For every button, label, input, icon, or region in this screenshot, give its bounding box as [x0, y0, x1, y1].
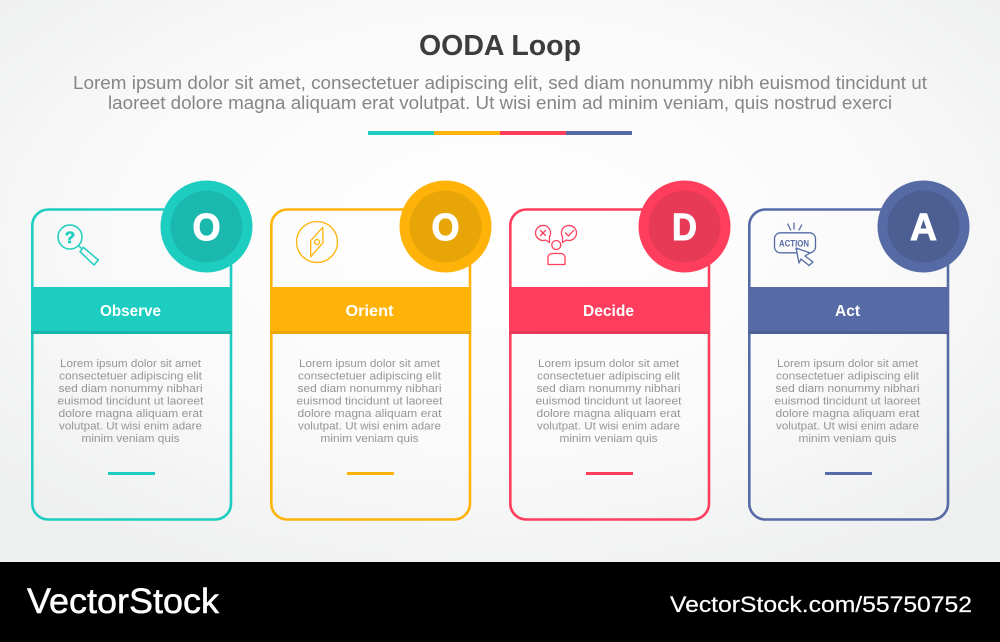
body text: Decide: Lorem ipsum dolor sit amet	[538, 358, 679, 370]
header band: Observe: Observe	[100, 303, 161, 320]
badge: A	[878, 180, 970, 272]
header band: Decide	[509, 287, 710, 334]
body text: Act: Lorem ipsum dolor sit amet	[777, 358, 918, 370]
header band: Orient: Orient	[346, 303, 394, 320]
body text: Observe: Lorem ipsum dolor sit amet	[60, 358, 201, 370]
body text: Act: minim veniam quis	[798, 433, 897, 445]
body text: Decide: sed diam nonummy nibhari	[536, 383, 680, 395]
title: OODA Loop	[419, 30, 581, 62]
footer image id: VectorStock.com/55750752	[670, 592, 972, 617]
header band: Act	[748, 287, 949, 334]
body text: Act: consectetuer adipiscing elit	[776, 370, 919, 382]
header band: Decide: Decide	[583, 303, 634, 320]
icon: magnifier with question mark: ?	[65, 228, 75, 247]
body text: Observe: consectetuer adipiscing elit	[59, 370, 202, 382]
body text: Observe: volutpat. Ut wisi enim adare	[59, 420, 202, 432]
subtitle: Lorem ipsum dolor sit amet, consectetuer adipiscing elit, sed diam nonummy nibh euismod tincidunt ut	[73, 73, 927, 93]
body text: Act: volutpat. Ut wisi enim adare	[776, 420, 919, 432]
body text: Observe: sed diam nonummy nibhari	[58, 383, 202, 395]
icon: compass	[296, 222, 338, 262]
accent line: Decide	[586, 472, 633, 475]
body text: Act: dolore magna aliquam erat	[776, 408, 920, 420]
icon: person weighing decision	[536, 225, 576, 264]
body text: Orient	[296, 358, 442, 445]
badge: D	[638, 180, 730, 272]
body text: Observe	[58, 358, 204, 445]
footer bar	[0, 562, 1000, 642]
icon: action button with cursor: ACTION	[779, 238, 809, 248]
body text: Decide: consectetuer adipiscing elit	[537, 370, 680, 382]
badge: D: D	[672, 207, 697, 249]
footer logo: VectorStock	[27, 582, 220, 621]
body text: Orient: consectetuer adipiscing elit	[298, 370, 441, 382]
badge: O: O	[432, 207, 460, 249]
body text: Decide	[536, 358, 682, 445]
panel: Decide	[509, 180, 730, 520]
panel: Orient	[270, 180, 492, 520]
header band: Observe	[31, 287, 232, 334]
accent line: Observe	[108, 472, 155, 475]
badge: O: O	[192, 207, 220, 249]
badge: O	[400, 180, 492, 272]
accent line: Orient	[347, 472, 394, 475]
body text: Decide: minim veniam quis	[560, 433, 658, 445]
body text: Orient: minim veniam quis	[320, 433, 419, 445]
icon: action button with cursor	[774, 223, 816, 266]
body text: Orient: sed diam nonummy nibhari	[298, 383, 442, 395]
colour divider	[368, 131, 632, 135]
badge: O	[160, 180, 252, 272]
subtitle	[73, 73, 927, 113]
panel: Observe	[31, 180, 252, 520]
body text: Observe: minim veniam quis	[82, 433, 180, 445]
icon: magnifier with question mark	[58, 225, 98, 265]
body text: Observe: euismod tincidunt ut laoreet	[58, 396, 204, 408]
subtitle: laoreet dolore magna aliquam erat volutpat. Ut wisi enim ad minim veniam, quis nostrud exerci	[108, 93, 892, 113]
body text: Observe: dolore magna aliquam erat	[58, 408, 202, 420]
body text: Decide: euismod tincidunt ut laoreet	[536, 396, 682, 408]
header band: Act: Act	[835, 303, 861, 320]
body text: Orient: volutpat. Ut wisi enim adare	[298, 420, 441, 432]
body text: Decide: volutpat. Ut wisi enim adare	[537, 420, 680, 432]
body text: Act	[774, 358, 920, 445]
badge: A: A	[910, 207, 937, 249]
body text: Decide: dolore magna aliquam erat	[536, 408, 680, 420]
body text: Orient: dolore magna aliquam erat	[298, 408, 442, 420]
body text: Act: euismod tincidunt ut laoreet	[774, 396, 920, 408]
body text: Orient: euismod tincidunt ut laoreet	[296, 396, 442, 408]
body text: Act: sed diam nonummy nibhari	[776, 383, 920, 395]
accent line: Act	[825, 472, 872, 475]
header band: Orient	[270, 287, 471, 334]
body text: Orient: Lorem ipsum dolor sit amet	[299, 358, 440, 370]
panel: Act	[748, 180, 970, 520]
